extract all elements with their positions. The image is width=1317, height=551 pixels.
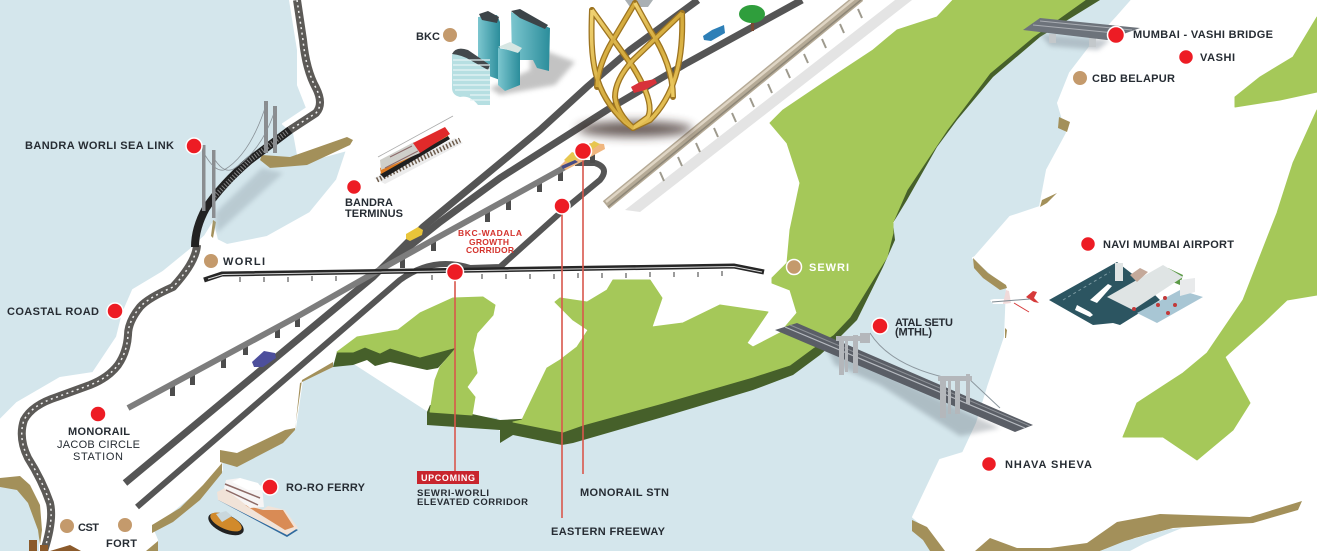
highway roads bbox=[125, 0, 802, 483]
BKC-Wadala growth corridor label bbox=[458, 228, 522, 255]
place labels: COASTAL ROAD bbox=[7, 306, 99, 318]
car: yellow taxi bbox=[406, 227, 423, 241]
Eastern Freeway bbox=[137, 163, 604, 507]
place labels: TERMINUS bbox=[345, 208, 403, 220]
BKC-Wadala growth corridor label: BKC-WADALA bbox=[458, 228, 522, 238]
east land bbox=[913, 0, 1317, 551]
monorail viaduct bbox=[128, 152, 595, 408]
place labels: FORT bbox=[106, 538, 137, 550]
train bbox=[374, 116, 463, 184]
place labels: (MTHL) bbox=[895, 326, 932, 338]
place labels: VASHI bbox=[1200, 52, 1235, 64]
Sewri-Worli elevated corridor bbox=[204, 266, 764, 282]
tan markers bbox=[60, 28, 1087, 533]
place labels: BKC bbox=[416, 31, 440, 43]
place labels: BANDRA bbox=[345, 197, 393, 209]
creek behind south bank bbox=[1100, 528, 1182, 551]
place labels: SEWRI-WORLI bbox=[417, 488, 489, 499]
Atal Setu bridge bbox=[775, 323, 1033, 436]
car: blue sedan bbox=[252, 351, 276, 367]
Bandra-Worli Sea Link bbox=[195, 101, 290, 247]
upcoming badge bbox=[417, 471, 479, 484]
leader lines bbox=[455, 151, 583, 518]
place labels: NHAVA SHEVA bbox=[1005, 459, 1092, 471]
mangrove patch: Sewri and eastern waterfront bbox=[513, 0, 1085, 432]
coastal road bbox=[22, 0, 320, 551]
place labels: RO-RO FERRY bbox=[286, 482, 366, 494]
place labels: STATION bbox=[73, 451, 123, 463]
gold tulip logo bbox=[577, 0, 693, 137]
Mumbai-Vashi bridge bbox=[1023, 18, 1140, 50]
place labels: NAVI MUMBAI AIRPORT bbox=[1103, 239, 1234, 251]
car: red bbox=[631, 79, 657, 93]
truck: blue bbox=[703, 25, 725, 41]
place labels: ELEVATED CORRIDOR bbox=[417, 497, 528, 508]
place labels: MONORAIL bbox=[68, 426, 130, 438]
mangrove patch: south peninsula bbox=[337, 297, 495, 415]
BKC towers bbox=[452, 9, 575, 105]
tug boat bbox=[205, 508, 247, 540]
place labels: EASTERN FREEWAY bbox=[551, 526, 666, 538]
ferry bbox=[217, 478, 298, 537]
coastal banks bbox=[0, 117, 1302, 551]
red markers bbox=[90, 26, 1194, 495]
BKC-Wadala growth corridor label: CORRIDOR bbox=[466, 245, 514, 255]
railway shadow bbox=[625, 0, 912, 212]
place labels: BANDRA WORLI SEA LINK bbox=[25, 140, 174, 152]
airplane bbox=[990, 290, 1039, 312]
place labels: CST bbox=[78, 522, 99, 534]
tree bbox=[739, 5, 765, 31]
green side walls bbox=[333, 0, 1100, 445]
Navi Mumbai airport bbox=[1049, 262, 1203, 325]
place labels: CBD BELAPUR bbox=[1092, 73, 1175, 85]
BKC-Wadala growth corridor label: GROWTH bbox=[469, 237, 509, 247]
place labels: SEWRI bbox=[809, 262, 849, 274]
railway viaduct bbox=[606, 0, 862, 207]
monorail train bbox=[560, 141, 605, 170]
place labels: ATAL SETU bbox=[895, 317, 953, 329]
mangrove patch: east bbox=[1123, 110, 1317, 460]
place labels: MONORAIL STN bbox=[580, 487, 669, 499]
old city buildings bbox=[29, 540, 81, 551]
place labels: MUMBAI - VASHI BRIDGE bbox=[1133, 29, 1273, 41]
mangrove patch: north-east bbox=[1235, 17, 1317, 107]
place labels: JACOB CIRCLE bbox=[57, 439, 140, 451]
upcoming badge: UPCOMING bbox=[421, 473, 475, 483]
west land bbox=[0, 0, 1040, 551]
place labels: WORLI bbox=[223, 256, 265, 268]
